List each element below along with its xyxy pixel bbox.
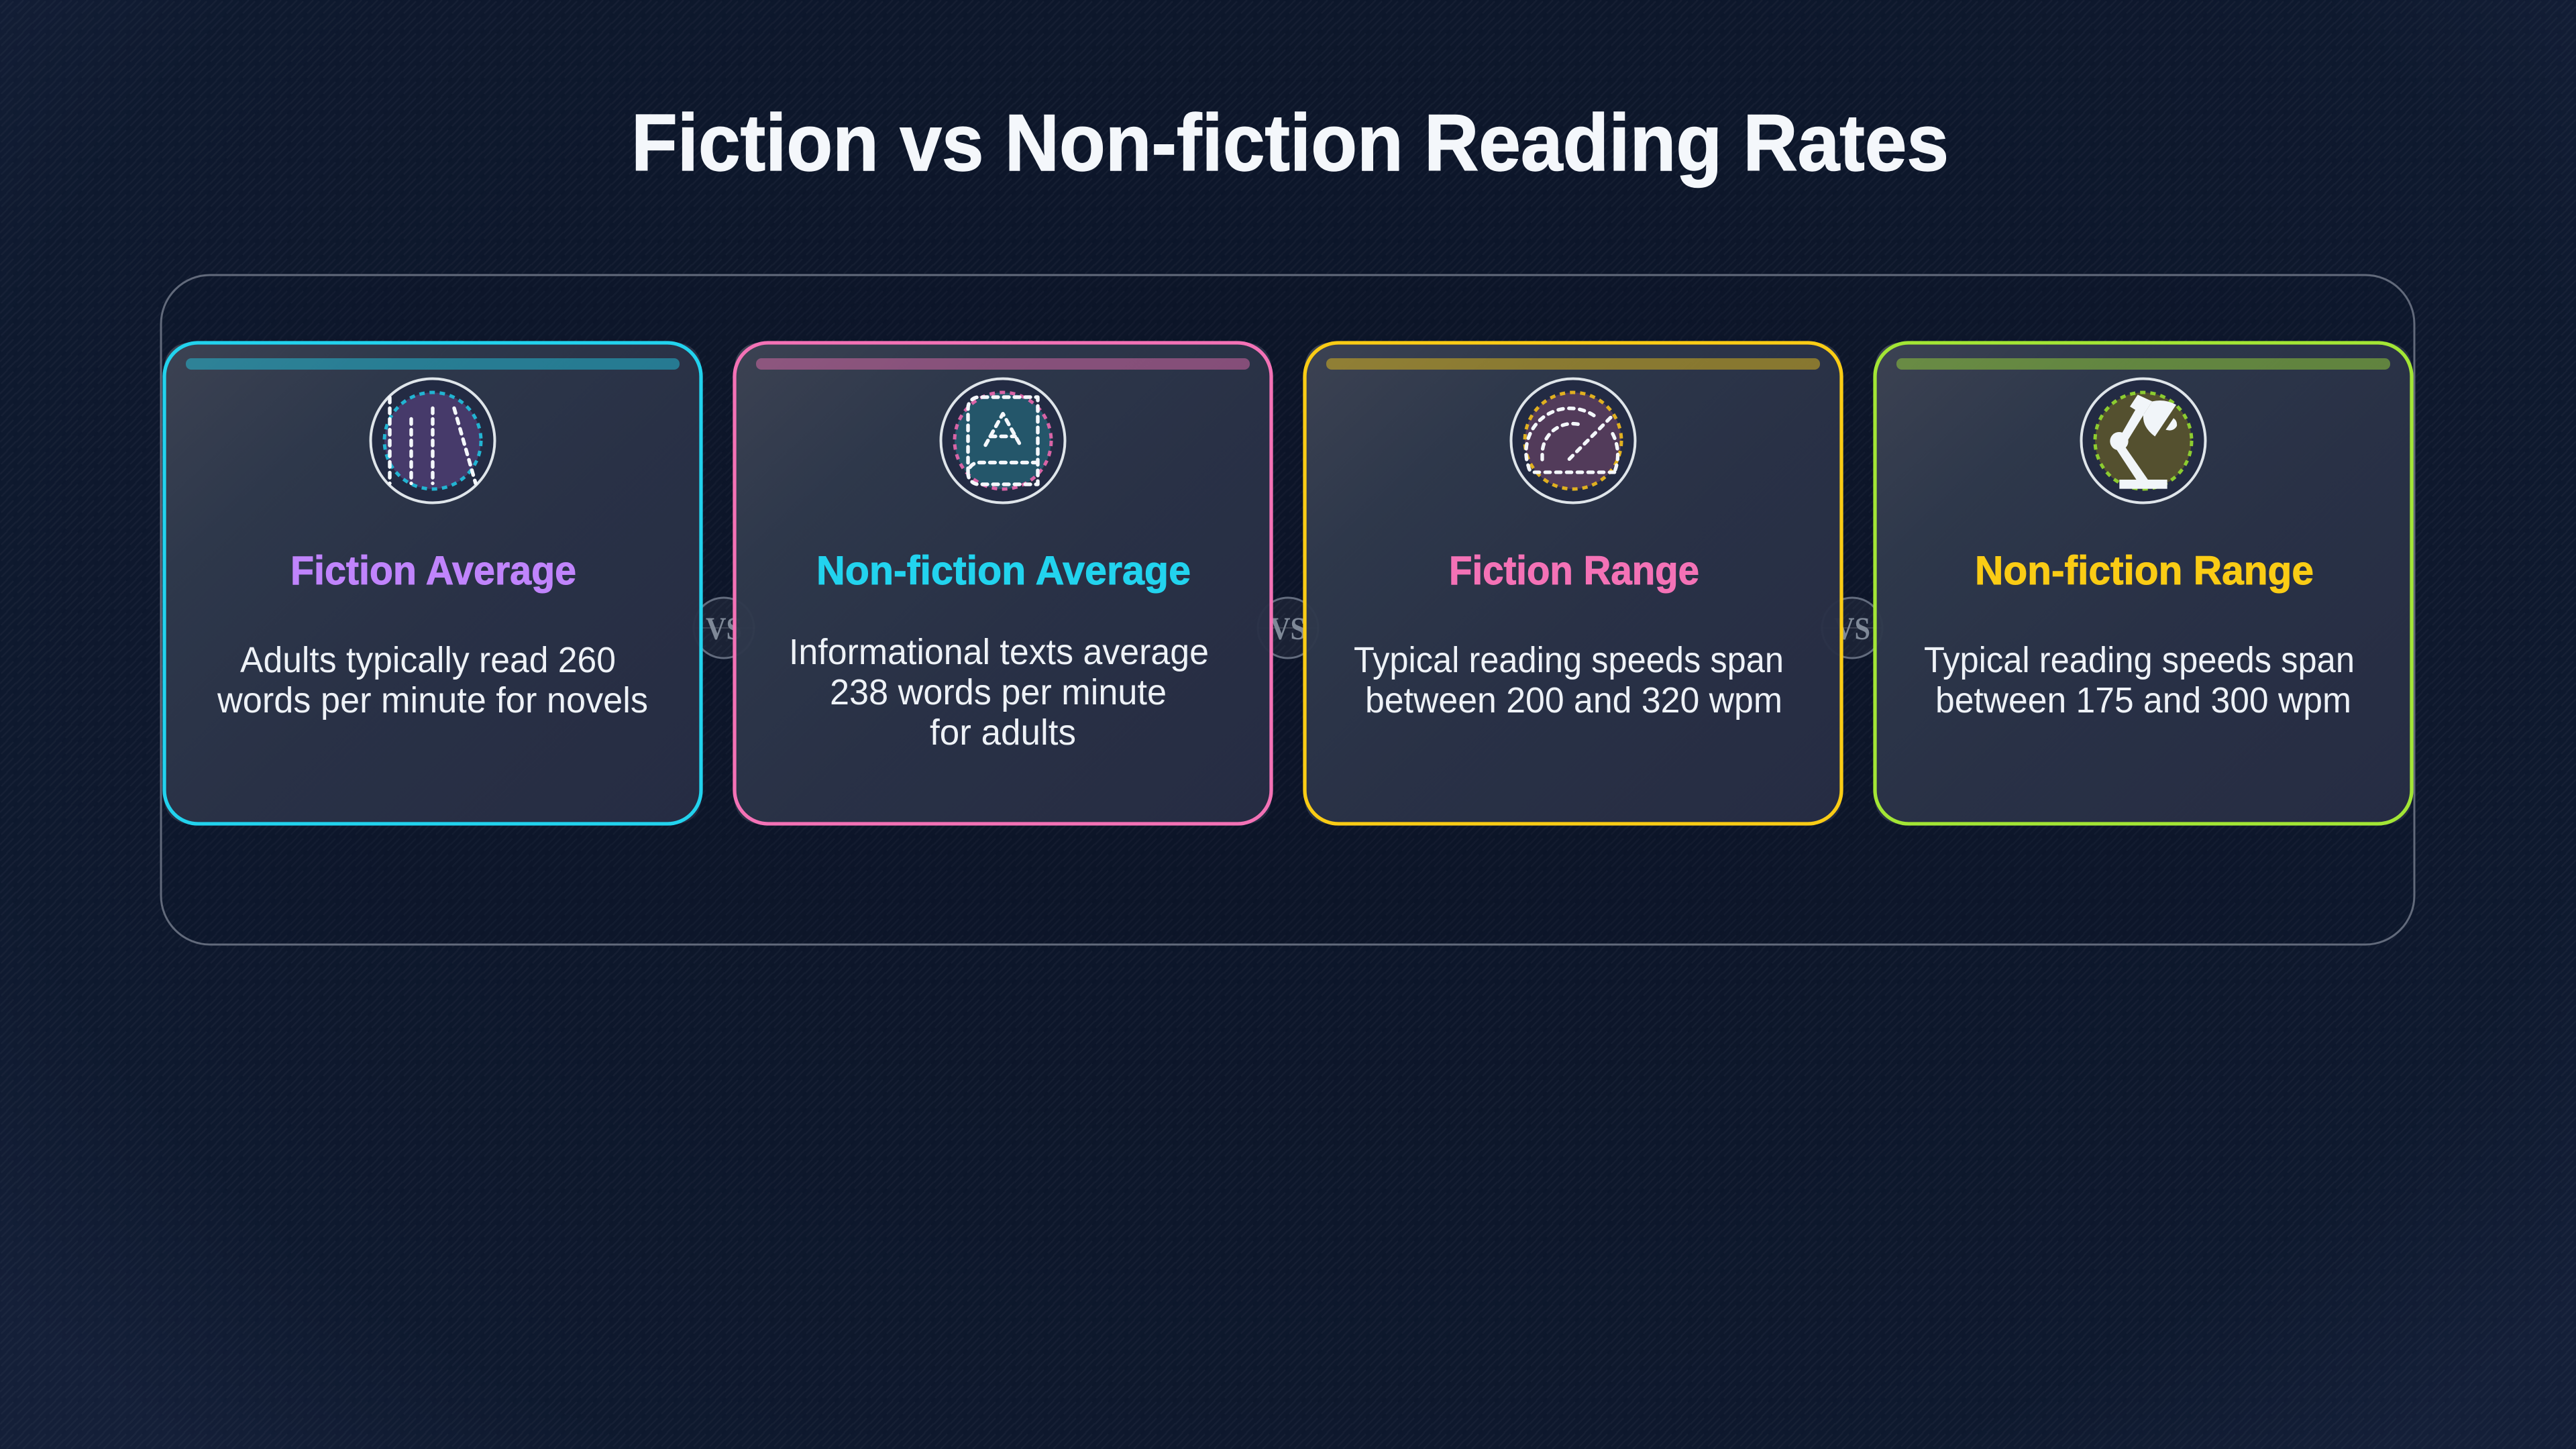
heading: Non-fiction Range bbox=[1975, 548, 2314, 593]
description: Adults typically read 260 bbox=[240, 640, 616, 680]
vs badge 3 bbox=[1822, 598, 1882, 658]
accent bar bbox=[1896, 358, 2390, 370]
panel: fiction average card bbox=[164, 343, 701, 824]
heading: Fiction Range bbox=[1449, 548, 1699, 593]
description: between 200 and 320 wpm bbox=[1365, 680, 1782, 720]
icon: speed gauge bbox=[1511, 378, 1635, 503]
accent bar bbox=[186, 358, 680, 370]
panel: comparison container bbox=[161, 275, 2414, 945]
description: words per minute for novels bbox=[217, 680, 648, 720]
panel: non-fiction range card bbox=[1875, 343, 2412, 824]
vs badge 1: VS bbox=[706, 611, 742, 647]
icon: book with letter A bbox=[941, 378, 1065, 503]
vs badge 2: VS bbox=[1270, 611, 1306, 647]
icon: library books bbox=[370, 378, 495, 503]
description: Typical reading speeds span bbox=[1354, 640, 1784, 680]
accent bar bbox=[756, 358, 1250, 370]
description: Informational texts average bbox=[789, 632, 1209, 672]
vs badge 2 bbox=[1258, 598, 1318, 658]
panel: fiction range card bbox=[1305, 343, 1841, 824]
description bbox=[1924, 640, 2355, 720]
description bbox=[217, 640, 648, 720]
icon: desk lamp bbox=[2081, 378, 2206, 503]
description: Typical reading speeds span bbox=[1924, 640, 2355, 680]
description: between 175 and 300 wpm bbox=[1935, 680, 2351, 720]
description: 238 words per minute bbox=[830, 672, 1167, 712]
vs badge 1 bbox=[694, 598, 754, 658]
title: Fiction vs Non-fiction Reading Rates bbox=[631, 98, 1949, 188]
accent bar bbox=[1326, 358, 1820, 370]
description bbox=[789, 632, 1209, 753]
description bbox=[1354, 640, 1784, 720]
description: for adults bbox=[930, 712, 1076, 753]
panel: non-fiction average card bbox=[735, 343, 1271, 824]
heading: Non-fiction Average bbox=[816, 548, 1191, 593]
vs badge 3: VS bbox=[1834, 611, 1870, 647]
heading: Fiction Average bbox=[290, 548, 576, 593]
